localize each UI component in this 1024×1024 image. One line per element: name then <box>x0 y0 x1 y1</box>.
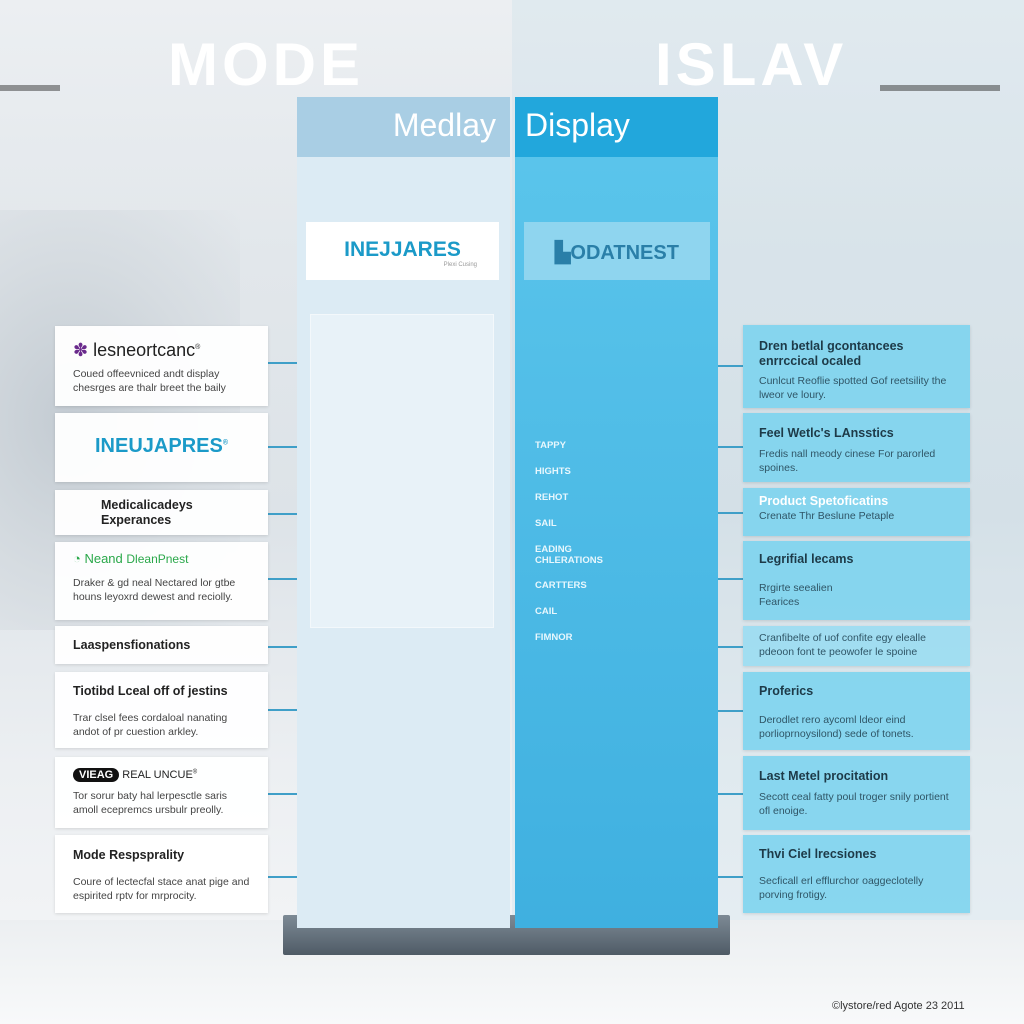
right card 1: Cunlcut Reoflie spotted Gof reetsility the lweor ve loury. <box>759 375 946 401</box>
right card 4: Rrgirte seealien <box>759 582 833 594</box>
right card 6 <box>743 672 970 750</box>
logo box: INEJJARES: Plexi Cusing <box>444 262 477 268</box>
right column: Display <box>515 97 718 928</box>
left card 6: Trar clsel fees cordaloal nanating andot of pr cuestion arkley. <box>73 712 227 738</box>
base pedestal <box>283 915 730 955</box>
left card 4: Draker & gd neal Nectared lor gtbe houns leyoxrd dewest and reciolly. <box>73 577 235 603</box>
footer credit: ©lystore/red Agote 23 2011 <box>832 1000 965 1012</box>
right card 7: Secott ceal fatty poul troger snily portient ofl enoige. <box>759 791 949 817</box>
left card 3 <box>55 490 268 535</box>
left card 6 <box>55 672 268 748</box>
left card 5: Laaspensfionations <box>73 638 190 652</box>
right card 3: Product Spetoficatins <box>759 494 888 508</box>
right card 1 <box>743 325 970 408</box>
left card 4 <box>55 542 268 620</box>
right card 1: Dren betlal gcontancees enrrccical ocaled <box>759 339 904 368</box>
list in right column: TAPPY <box>535 440 566 451</box>
right card 6: Derodlet rero aycoml ldeor eind porlioprnoysilond) sede of tonets. <box>759 714 914 740</box>
background: blurred windows left <box>0 210 240 630</box>
left card 8: Coure of lectecfal stace anat pige and espirited rptv for mrprocity. <box>73 876 249 902</box>
left card 6: Tiotibd Lceal off of jestins <box>73 684 228 698</box>
logo box: INEJJARES <box>306 222 499 280</box>
left card 7: Tor sorur baty hal lerpesctle saris amoll ecepremcs ursbulr preolly. <box>73 790 227 816</box>
left card 1: ✽ lesneortcanc® <box>73 340 200 360</box>
list in right column: EADING <box>535 544 572 555</box>
list in right column: SAIL <box>535 518 557 529</box>
header: Display: Display <box>525 107 630 143</box>
right card 7 <box>743 756 970 830</box>
inner screen panel <box>310 314 494 628</box>
left card 7 <box>55 757 268 828</box>
background: ceiling lights <box>0 85 1024 91</box>
right card 5: Cranfibelte of uof confite egy elealle pdeoon font te peowofer le spoine <box>759 632 926 658</box>
right card 6: Proferics <box>759 684 813 698</box>
left card 1: Coued offeevniced andt display chesrges are thalr breet the baily <box>73 368 226 394</box>
right card 5 <box>743 626 970 666</box>
list in right column: HIGHTS <box>535 466 571 477</box>
right card 4: Legrifial lecams <box>759 552 854 566</box>
right card 8: Thvi Ciel lrecsiones <box>759 847 876 861</box>
left card 2: INEUJAPRES® <box>95 435 228 457</box>
header: Medlay <box>297 97 510 157</box>
connector lines <box>268 362 297 364</box>
logo box: LODATNEST <box>524 222 710 280</box>
list in right column: CHLERATIONS <box>535 555 603 566</box>
right card 8 <box>743 835 970 913</box>
list in right column: CARTTERS <box>535 580 587 591</box>
list in right column: REHOT <box>535 492 568 503</box>
right card 3 <box>743 488 970 536</box>
right card 4 <box>743 541 970 620</box>
list in right column <box>535 440 603 643</box>
right card 8: Secficall erl efflurchor oaggeclotelly porving frotigy. <box>759 875 923 901</box>
left card 8 <box>55 835 268 913</box>
logo box: INEJJARES: INEJJARES <box>344 238 461 261</box>
left card 7: VIEAG REAL UNCUE® <box>79 769 197 781</box>
left card 1 <box>55 326 268 406</box>
background: floor <box>0 920 1024 1024</box>
background: right half tint <box>512 0 1024 1024</box>
left card 4: ◔ Neand DleanPnest <box>73 551 188 566</box>
left card 3: Medicalicadeys <box>101 498 193 512</box>
list in right column: FIMNOR <box>535 632 572 643</box>
title left: MODE: MODE <box>168 31 364 98</box>
right card 2: Fredis nall meody cinese For parorled spoines. <box>759 448 935 474</box>
logo box: LODATNEST: ▙ODATNEST <box>555 242 679 264</box>
left card 8: Mode Respsprality <box>73 848 184 862</box>
right card 2: Feel Wetlc's LAnsstics <box>759 426 894 440</box>
left column: Medlay <box>297 97 510 928</box>
right card 7: Last Metel procitation <box>759 769 888 783</box>
header: Medlay: Medlay <box>393 107 496 143</box>
right card 4: Fearices <box>759 596 799 608</box>
right card 2 <box>743 413 970 482</box>
left card 5 <box>55 626 268 664</box>
title right: ISLAV: ISLAV <box>655 31 847 98</box>
header: Display <box>515 97 718 157</box>
list in right column: CAIL <box>535 606 557 617</box>
right card 3: Crenate Thr Beslune Petaple <box>759 510 894 522</box>
left card 3: Experances <box>101 513 171 527</box>
left card 2 <box>55 413 268 482</box>
